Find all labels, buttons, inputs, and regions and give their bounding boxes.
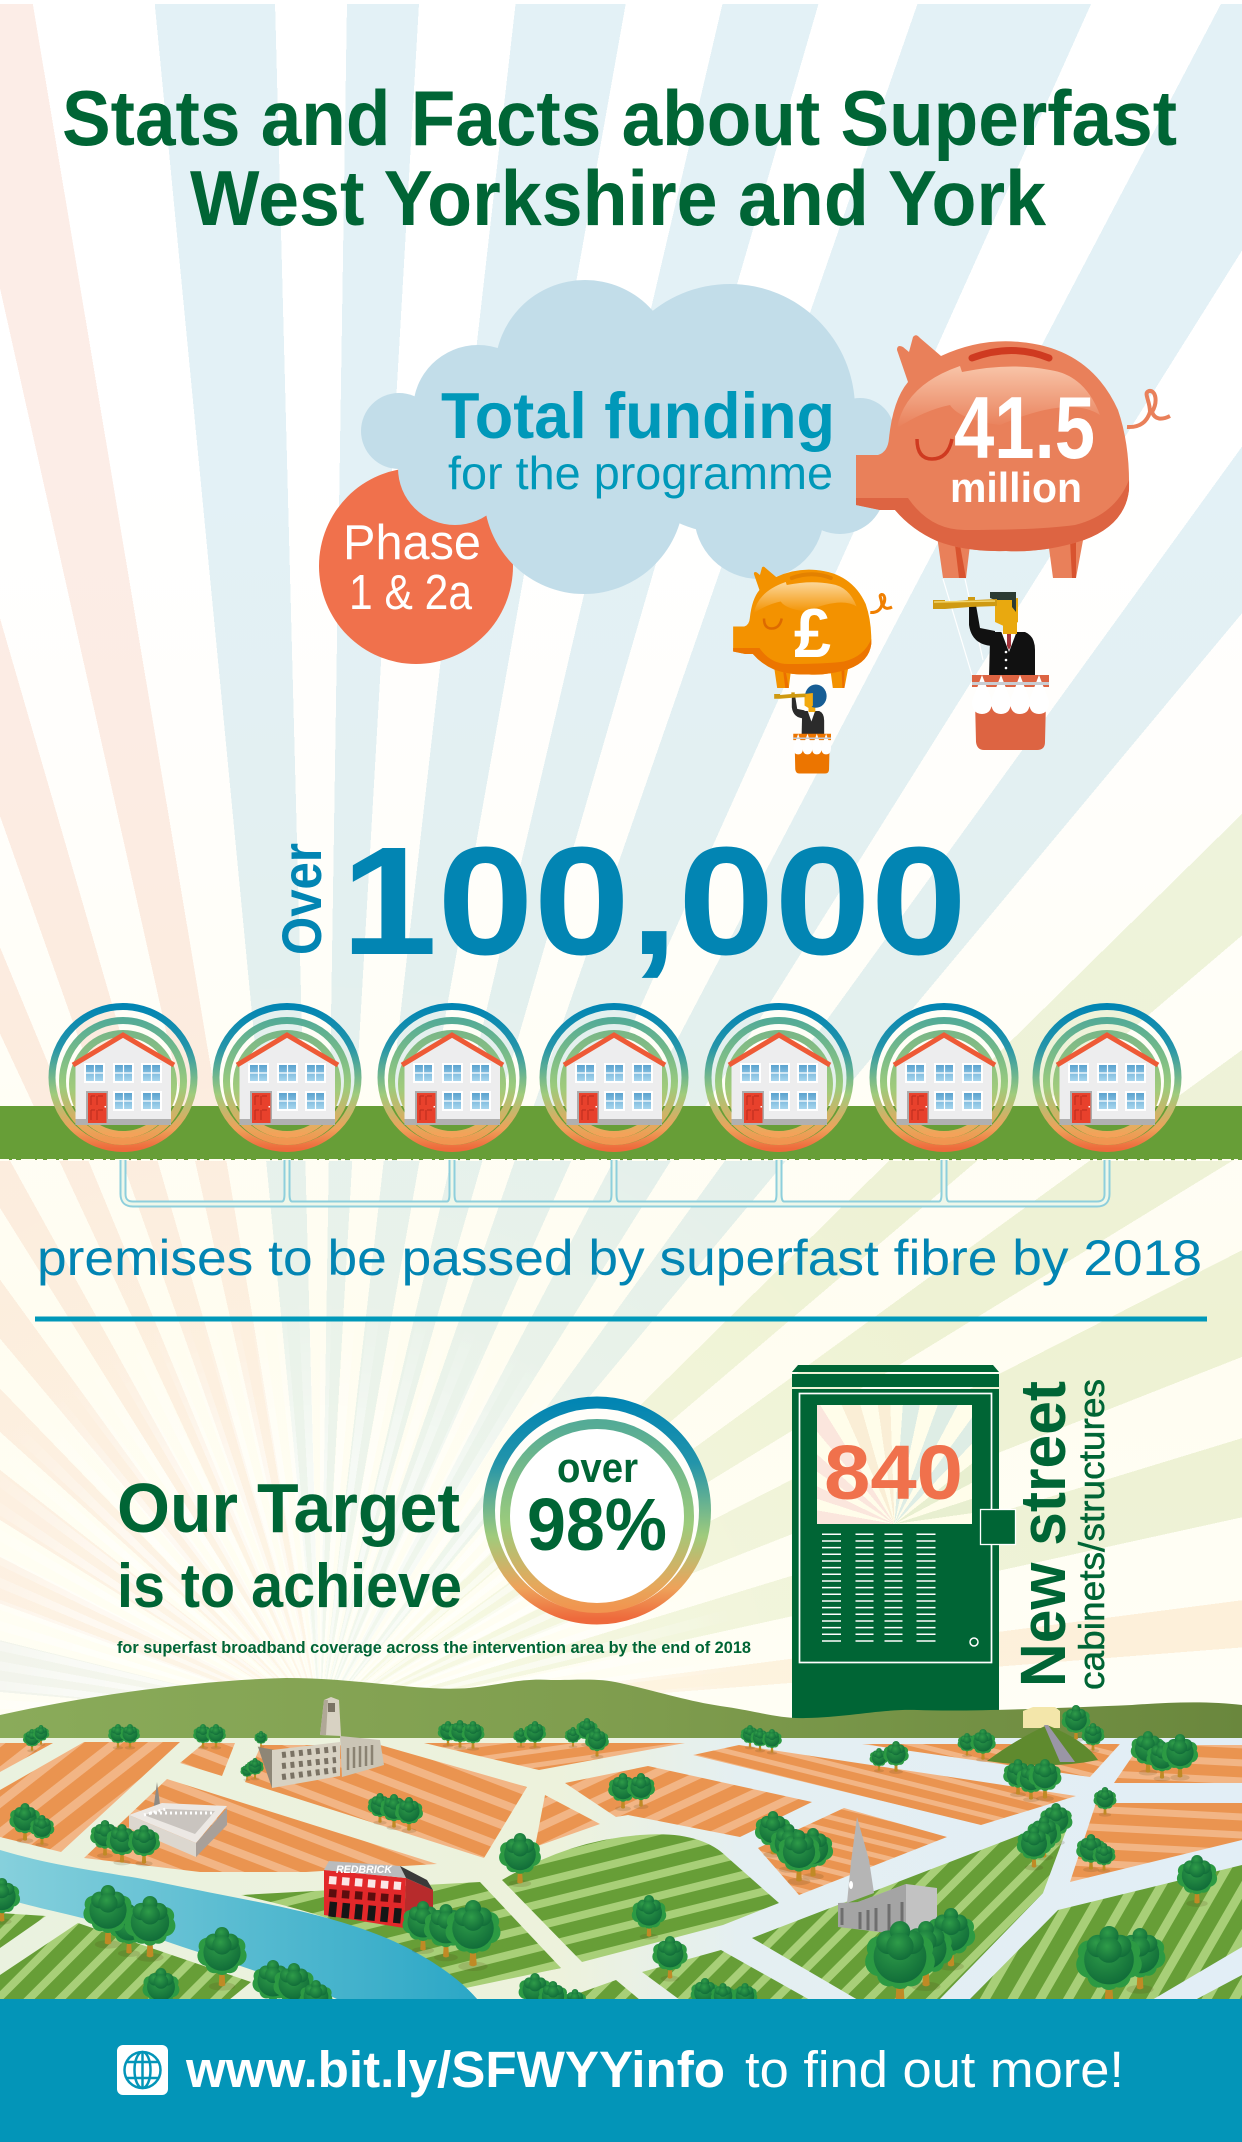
cabinet display with 840 — [817, 1405, 972, 1524]
large piggy bank balloon: million — [950, 464, 1082, 511]
footer bar: www.bit.ly/SFWYYinfo — [185, 2041, 725, 2098]
connected house 4 — [543, 1006, 685, 1148]
footer bar — [0, 1999, 1242, 2142]
phase badge — [319, 468, 513, 664]
98% target ring: 98% — [527, 1483, 667, 1566]
university tower building — [258, 1697, 384, 1788]
connected house 2 — [216, 1006, 358, 1148]
premises caption: premises to be passed by superfast fibre by 2018 — [37, 1230, 1202, 1286]
connected house 7 — [1036, 1006, 1178, 1148]
funding cloud: Total funding — [441, 379, 835, 452]
cabinet display with 840: 840 — [824, 1430, 963, 1516]
church — [838, 1817, 937, 1935]
fibre pipes — [123, 1160, 1107, 1204]
footer bar: to find out more! — [745, 2041, 1124, 2098]
small piggy bank balloon: £ — [794, 594, 831, 672]
connected house 3 — [381, 1006, 523, 1148]
new street cabinets label — [1007, 1379, 1112, 1690]
large man in basket — [933, 579, 1049, 750]
distant hills — [0, 1678, 1242, 1760]
courtyard building — [129, 1782, 227, 1857]
funding cloud: for the programme — [448, 447, 833, 499]
98% target ring — [489, 1402, 705, 1618]
over 100,000 headline: 100,000 — [341, 815, 967, 987]
over 100,000 headline: Over — [270, 843, 333, 955]
redbrick building — [324, 1861, 433, 1928]
phase badge: Phase — [343, 516, 481, 570]
new street cabinets label: cabinets/structures — [1071, 1379, 1112, 1690]
icon: globe — [117, 2045, 168, 2095]
phase badge: 1 & 2a — [349, 566, 473, 620]
small piggy bank balloon — [733, 567, 892, 688]
connected house 1 — [52, 1006, 194, 1148]
map trees — [0, 1718, 1217, 2022]
title: Stats and Facts about Superfast — [62, 74, 1177, 162]
large piggy bank balloon — [856, 335, 1170, 578]
large piggy bank balloon: 41.5 — [954, 378, 1095, 477]
our target text: Our Target — [117, 1469, 460, 1547]
coverage footnote: for superfast broadband coverage across the intervention area by the end of 2018 — [117, 1638, 751, 1657]
map ground and roads — [0, 1738, 1242, 2000]
green fields — [0, 1815, 1242, 2000]
street cabinet — [792, 1365, 1016, 1729]
green ground strip — [0, 1106, 1242, 1160]
our target text — [117, 1469, 462, 1621]
redbrick building: REDBRICK — [336, 1864, 393, 1876]
castle on mound — [987, 1707, 1098, 1765]
connected house 5 — [708, 1006, 850, 1148]
title — [62, 74, 1177, 242]
98% target ring: over — [557, 1444, 638, 1491]
small man in basket — [774, 684, 831, 774]
title: West Yorkshire and York — [190, 154, 1047, 242]
funding cloud — [361, 280, 894, 594]
connected house 6 — [873, 1006, 1015, 1148]
new street cabinets label: New street — [1007, 1381, 1079, 1687]
our target text: is to achieve — [117, 1552, 462, 1621]
trees behind castle mound — [1062, 1705, 1104, 1753]
river — [0, 1850, 478, 2000]
orange fields — [0, 1742, 1242, 1895]
